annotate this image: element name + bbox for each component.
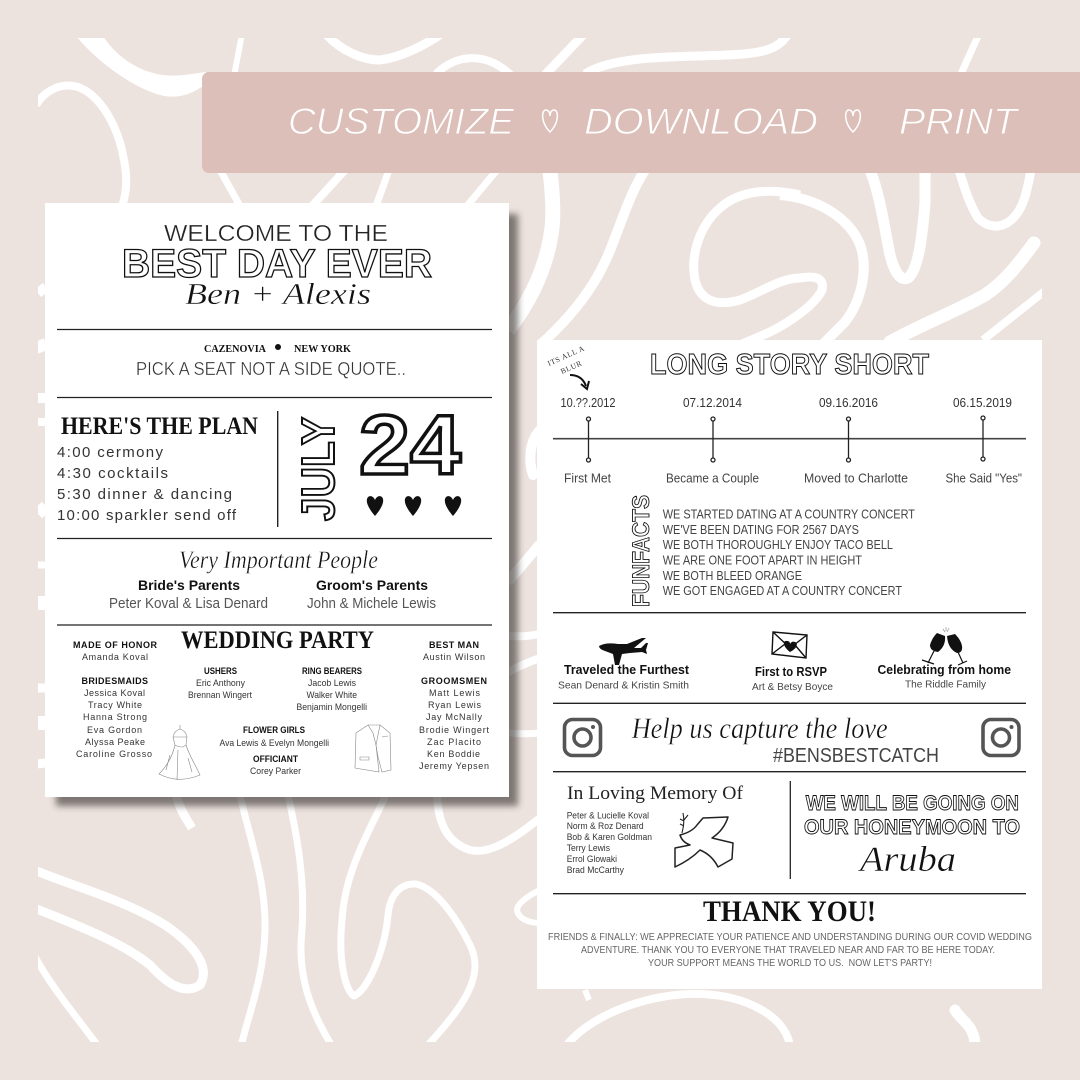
banner text: print: PRINT <box>899 101 1020 142</box>
bridal party column: Caroline Grosso <box>76 749 152 759</box>
groom party column: Jay McNally <box>426 712 482 722</box>
fun facts list: WE BOTH BLEED ORANGE <box>663 569 802 583</box>
hashtag callout <box>631 712 939 767</box>
traveled the furthest: Traveled the Furthest <box>564 663 690 677</box>
icon: instagram right <box>983 720 1019 756</box>
bridal party column: BRIDESMAIDS <box>82 676 148 686</box>
ushers: Brennan Wingert <box>188 690 252 700</box>
memorial names: Bob & Karen Goldman <box>567 832 652 842</box>
flower girls and officiant: FLOWER GIRLS <box>243 725 305 735</box>
groom party column: Matt Lewis <box>429 688 480 698</box>
arrow <box>570 375 589 389</box>
honeymoon message: OUR HONEYMOON TO <box>804 816 1020 839</box>
timeline labels: Became a Couple <box>666 472 759 486</box>
ring bearers: Benjamin Mongelli <box>296 702 367 712</box>
memorial names: Peter & Lucielle Koval <box>567 810 649 820</box>
fun facts heading: FUNFACTS <box>628 495 655 607</box>
banner text: download: DOWNLOAD <box>584 101 818 142</box>
note: its all a blur: BLUR <box>559 359 583 376</box>
fun facts list: WE GOT ENGAGED AT A COUNTRY CONCERT <box>663 584 902 598</box>
ring bearers: RING BEARERS <box>302 666 362 676</box>
groom party column: BEST MAN <box>429 640 479 650</box>
groom party column: Jeremy Yepsen <box>419 761 489 771</box>
note: its all a blur: ITS ALL A <box>546 344 586 368</box>
bridal party column: Eva Gordon <box>87 725 142 735</box>
location: CAZENOVIA <box>204 344 266 355</box>
schedule <box>57 444 237 524</box>
bridal party column: Alyssa Peake <box>85 737 145 747</box>
timeline labels <box>564 472 1022 486</box>
icon: airplane <box>599 638 648 665</box>
groom party column: Austin Wilson <box>423 652 485 662</box>
fun facts list: WE STARTED DATING AT A COUNTRY CONCERT <box>663 508 915 522</box>
ring bearers: Walker White <box>306 690 357 700</box>
first to rsvp: Art & Betsy Boyce <box>752 681 833 693</box>
icon: wedding dress <box>159 725 200 780</box>
traveled the furthest <box>558 663 690 692</box>
parents: Bride's Parents <box>138 577 240 593</box>
icon: champagne glasses <box>922 627 967 665</box>
timeline labels: She Said "Yes" <box>946 472 1022 486</box>
heading: wedding party: WEDDING PARTY <box>181 627 374 654</box>
banner heart 1 <box>543 110 557 132</box>
location: NEW YORK <box>294 344 352 355</box>
groom party column: Ken Boddie <box>427 749 480 759</box>
traveled the furthest: Sean Denard & Kristin Smith <box>558 680 689 692</box>
first to rsvp <box>752 665 833 693</box>
celebrating from home: Celebrating from home <box>878 663 1011 677</box>
date: july: JULY <box>292 417 344 521</box>
title: best day ever: BEST DAY EVER <box>122 242 432 286</box>
bridal party column: Amanda Koval <box>82 652 148 662</box>
flower girls and officiant <box>220 725 329 776</box>
banner <box>202 72 1080 173</box>
celebrating from home: The Riddle Family <box>905 678 987 690</box>
schedule: 4:00 cermony <box>57 444 164 461</box>
icon: envelope with heart <box>772 632 807 658</box>
schedule: 4:30 cocktails <box>57 465 168 482</box>
heading: very important people: Very Important People <box>179 547 378 574</box>
icon: instagram left <box>564 720 600 756</box>
schedule: 10:00 sparkler send off <box>57 507 237 524</box>
fun facts list <box>663 508 915 598</box>
bridal party column: Hanna Strong <box>83 712 147 722</box>
couple names: Ben + Alexis <box>185 276 371 311</box>
timeline dates: 07.12.2014 <box>683 395 742 410</box>
heading: in loving memory of: In Loving Memory Of <box>567 783 744 804</box>
groom party column: GROOMSMEN <box>421 676 487 686</box>
bridal party column <box>73 640 158 759</box>
right card: wedding program back <box>537 340 1042 989</box>
banner heart 2 <box>846 110 860 132</box>
closing message <box>548 931 1032 969</box>
honeymoon message: Aruba <box>858 839 956 879</box>
flower girls and officiant: Ava Lewis & Evelyn Mongelli <box>220 738 329 748</box>
timeline dates <box>560 395 1012 410</box>
memorial names: Terry Lewis <box>567 843 611 853</box>
fun facts list: WE'VE BEEN DATING FOR 2567 DAYS <box>663 523 859 537</box>
schedule: 5:30 dinner & dancing <box>57 486 232 503</box>
parents: Groom's Parents <box>316 577 428 593</box>
closing message: ADVENTURE. THANK YOU TO EVERYONE THAT TRAVELED NEAR AND FAR TO BE HERE TODAY. <box>581 944 995 956</box>
groom party column: Brodie Wingert <box>419 725 489 735</box>
memorial names: Brad McCarthy <box>567 865 625 875</box>
ushers: USHERS <box>204 666 237 676</box>
hashtag callout: Help us capture the love <box>631 712 888 745</box>
heading: long story short: LONG STORY SHORT <box>650 349 929 381</box>
memorial names <box>567 810 652 875</box>
timeline labels: First Met <box>564 472 612 486</box>
groom party column <box>419 640 489 771</box>
quote: PICK A SEAT NOT A SIDE QUOTE.. <box>136 359 406 379</box>
timeline <box>553 395 1026 486</box>
timeline labels: Moved to Charlotte <box>804 472 908 486</box>
left card shadow <box>56 214 518 806</box>
three hearts <box>367 496 461 516</box>
bridal party column: Tracy White <box>88 700 142 710</box>
date: 24: 24 <box>359 398 461 492</box>
honeymoon message: WE WILL BE GOING ON <box>806 792 1019 815</box>
first to rsvp: First to RSVP <box>755 665 827 679</box>
parents <box>109 577 436 612</box>
closing message: YOUR SUPPORT MEANS THE WORLD TO US. NOW LET'S PARTY! <box>648 957 932 969</box>
heading: here's the plan: HERE'S THE PLAN <box>61 413 258 440</box>
heading: thank you: THANK YOU! <box>703 895 876 928</box>
bridal party column: Jessica Koval <box>84 688 145 698</box>
ushers <box>188 666 252 700</box>
parents: John & Michele Lewis <box>307 596 436 612</box>
flower girls and officiant: Corey Parker <box>250 766 301 776</box>
groom party column: Zac Placito <box>427 737 481 747</box>
location <box>204 344 352 355</box>
ring bearers <box>296 666 367 712</box>
groom party column: Ryan Lewis <box>428 700 482 710</box>
parents: Peter Koval & Lisa Denard <box>109 596 268 612</box>
fun facts list: WE BOTH THOROUGHLY ENJOY TACO BELL <box>663 538 893 552</box>
memorial names: Norm & Roz Denard <box>567 821 644 831</box>
bridal party column: MADE OF HONOR <box>73 640 158 650</box>
honeymoon message <box>804 792 1020 879</box>
left card: wedding program front <box>45 203 509 797</box>
banner text: customize: CUSTOMIZE <box>288 101 515 142</box>
timeline dates: 09.16.2016 <box>819 395 878 410</box>
fun facts list: WE ARE ONE FOOT APART IN HEIGHT <box>663 554 862 568</box>
flower girls and officiant: OFFICIANT <box>253 754 298 764</box>
ushers: Eric Anthony <box>196 678 245 688</box>
timeline dates: 06.15.2019 <box>953 395 1012 410</box>
icon: tuxedo jacket <box>355 725 391 772</box>
icon: dove <box>675 813 733 867</box>
hashtag callout: #BENSBESTCATCH <box>773 745 939 767</box>
celebrating from home <box>878 663 1011 690</box>
timeline dates: 10.??.2012 <box>560 395 616 410</box>
title: welcome: WELCOME TO THE <box>164 220 388 246</box>
memorial names: Errol Glowaki <box>567 854 617 864</box>
ring bearers: Jacob Lewis <box>308 678 356 688</box>
